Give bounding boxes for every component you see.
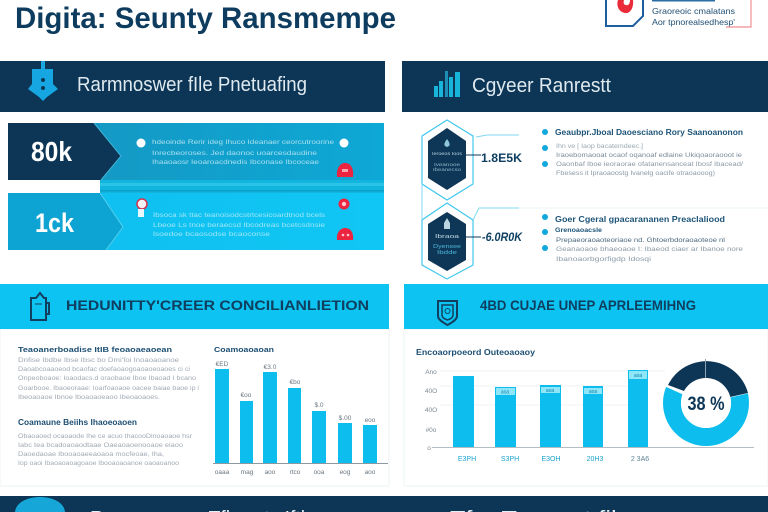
bar chart: left: €bo	[290, 379, 301, 386]
bar chart: left: Coamoaoaoan	[214, 345, 274, 354]
bar chart: right: aoa	[589, 389, 597, 395]
text block 2: Iabc tea bcadoaoaodtaae Oaeaoaoenooaoe eiaoo	[18, 442, 183, 449]
bar chart: left: €oo	[241, 392, 252, 399]
row: 80k: 80k	[31, 136, 72, 167]
bar chart: right: o	[427, 445, 431, 452]
icon: bottom dome	[15, 497, 65, 512]
donut chart: 38 %	[688, 394, 725, 415]
bar chart: left: eoo	[365, 417, 376, 424]
top-right badge: Graoreoic cmalatans	[652, 6, 735, 16]
text block 1: Onpeoboaoe: Ioaodacs.d oraobaoe Iboe Ibaoad I bcano	[18, 375, 196, 382]
stat 2: -6.0R0K	[482, 230, 523, 244]
hexagon 2: Ibraoa	[435, 234, 459, 240]
bullet list 2: Ibanoaorbgorfigdp Idosqi	[556, 256, 651, 263]
panel header	[0, 284, 389, 329]
bar chart: left: $.00	[339, 415, 352, 422]
text block 1: Dnfise Ibdbe Ibse Ibsc bo Dmi'foi Inoaoaoanoe	[18, 357, 179, 364]
row: 1ck: Lbeoe Ls tnoe beraecsd Ibcodreas bcetcsdnsie	[153, 222, 325, 229]
bar chart: left: oaaa	[215, 469, 230, 476]
panel: identity cyber concentration	[0, 284, 389, 486]
bar chart: left: mag	[241, 469, 254, 476]
bullet list 2: Prepaeoraoaoteoriaoe nd. Ghtoerbdoraoaoteoe nl	[556, 237, 726, 244]
bar chart: right: 40O	[425, 388, 437, 395]
row: 1ck	[8, 193, 384, 250]
bar chart: right: 2 3A6	[631, 456, 649, 463]
top-right badge: Aor tpnorealsedhesp'	[652, 17, 735, 27]
bar chart: right: 20H3	[587, 456, 603, 463]
bar chart: right: aoa	[501, 390, 509, 396]
bullet list 1: Oaonbaf Iboe ieoraorae ofatanensanceat Ibosf Ibacead/	[556, 161, 743, 168]
panel: cloud data breaching	[404, 284, 768, 486]
panel: ransomware file preparing	[0, 61, 385, 250]
icon: document	[31, 293, 49, 320]
panel heading: Cgyeer Ranrestt	[472, 75, 611, 97]
bar chart: right: aoa	[634, 373, 642, 379]
panel header	[402, 61, 768, 112]
text block 1: Daoabcoaaoeod bcaofac doefaoaogoaoaoeoaoes ci ci	[18, 366, 190, 373]
text block 2: Iop oaoi Ibaoaoaoagoaoe Ibooaoaoanoe oaoaoanoo	[18, 460, 179, 467]
panel: cyber ransom	[402, 61, 768, 279]
hexagon 1: Iveanooe	[434, 162, 461, 167]
bar chart: right	[416, 348, 754, 463]
row: 1ck: 1ck	[35, 208, 75, 238]
bar chart: left: ooa	[314, 469, 325, 476]
hexagon 2	[422, 203, 473, 279]
bar chart: right: Ano	[425, 369, 437, 376]
top-right badge	[606, 0, 751, 27]
bar chart: right: E3OH	[541, 456, 561, 463]
hexagon 1	[422, 120, 473, 200]
bullet list 2: Grenoaoacsle	[555, 228, 603, 234]
bar chart: right: S3PH	[501, 456, 519, 463]
card background	[0, 329, 389, 486]
hexagon 2: Dyensee	[433, 244, 461, 250]
bar chart: left: €3.0	[264, 364, 277, 371]
text block 1: Teaoanerboadise ItIB feoaoaeaoean	[18, 345, 172, 354]
bullet list 1	[542, 128, 743, 177]
bullet list 1: Fbesess it Ipraoaoostg Ivanelg oacife otraoaooog)	[556, 170, 715, 177]
panel heading: HEDUNITTY'CREER CONCILIANLIETION	[66, 297, 369, 313]
icon: shield	[28, 61, 58, 101]
bar chart: left: aoo	[265, 469, 276, 476]
card background	[404, 329, 768, 486]
panel header	[0, 61, 385, 112]
bar chart: right: E3PH	[458, 456, 476, 463]
bar chart: right: #0o	[426, 427, 437, 434]
panel heading: Rarmnoswer fIle Pnetuafing	[77, 74, 307, 96]
bullet list 2	[542, 214, 743, 263]
icon: shield badge	[438, 301, 457, 325]
hexagon 1: Ibeanecso	[433, 167, 462, 172]
bullet list 2: Goer Cgeral gpacarananen Preaclaliood	[555, 214, 725, 224]
hexagon 1: Ieroeos Ioos	[432, 151, 463, 156]
bullet list 2: Geanaoaoe bhaeoaoe I: Ibaeod ciaer ar Ibanoe nore	[556, 246, 743, 253]
bar chart: left: eog	[340, 469, 351, 476]
bar chart: left: aoo	[365, 469, 376, 476]
row: 80k: Inrecbeoroses. Jed daonoc uoarcesdaudine	[152, 150, 317, 157]
bar chart: left: €ED	[216, 361, 229, 368]
text block 2: Obaoaoed ocaoaode Ihe ce acuo thacooDinoaoaoe hsr	[18, 433, 193, 440]
bullet list 1: Iraoebomaooat ocaof oqanoaf edlaine Ukiqoaoraooot ie	[556, 152, 742, 159]
row: 1ck: Ibsoca sk ttac teanoisodcstrtcesicoardtnod bcels	[153, 212, 326, 219]
icon: city bars	[434, 71, 460, 97]
text block 1: Ibeoaoaoe Ibnoe Iboaoaoeaoo Ibeoaoaoes.	[18, 394, 160, 401]
row: 1ck: lsoedoe bcaosodse bcaoconse	[153, 231, 270, 238]
bottom banner	[0, 496, 768, 512]
hexagon 2: Ibdde	[437, 250, 457, 256]
connector lines	[422, 135, 768, 237]
panel header	[404, 284, 768, 329]
bullet list 1: Ihn ve [ Iaop bacatemdeec.]	[556, 143, 643, 150]
row: 80k: hdeoinde Rerir ideg Ihuco Ideanaer ceorcutroorine	[152, 139, 334, 146]
bar chart: left: rtco	[290, 469, 301, 476]
text block 1	[18, 345, 199, 401]
row: 80k	[8, 123, 384, 180]
bar chart: left: $.0	[314, 402, 324, 409]
text block 2: Coamaune Beiihs Ihaoeoaoen	[18, 418, 137, 427]
stat 1: 1.8E5K	[481, 151, 522, 165]
text block 1: Goarbooe. Ibaoeoraae: Ioarfoaoaoe oacee baiae baoe ip i	[18, 385, 199, 392]
donut chart	[661, 358, 750, 437]
title: Digita: Seunty Ransmempe	[15, 2, 396, 35]
bar chart: right: 40O	[425, 407, 437, 414]
bar chart: right: Encoaorpoeord Outeoaoaoy	[416, 348, 536, 357]
text block 2	[18, 418, 193, 467]
row: 80k: Ihaaoaosr Ieoaroacdnedis Ibconase Ibcoceae	[152, 159, 319, 166]
bar chart: left	[213, 345, 388, 476]
bullet list 1: Geaubpr.Jboal Daoesciano Rory Saanoanonon	[555, 128, 743, 137]
divider band	[100, 180, 384, 193]
panel heading: 4BD CUJAE UNEP APRLEEMIHNG	[480, 297, 696, 313]
text block 2: Daoedaoae Ibooaoaeeaoaoa mocfeoae, Iha,	[18, 451, 164, 458]
bar chart: right: aoa	[546, 388, 554, 394]
